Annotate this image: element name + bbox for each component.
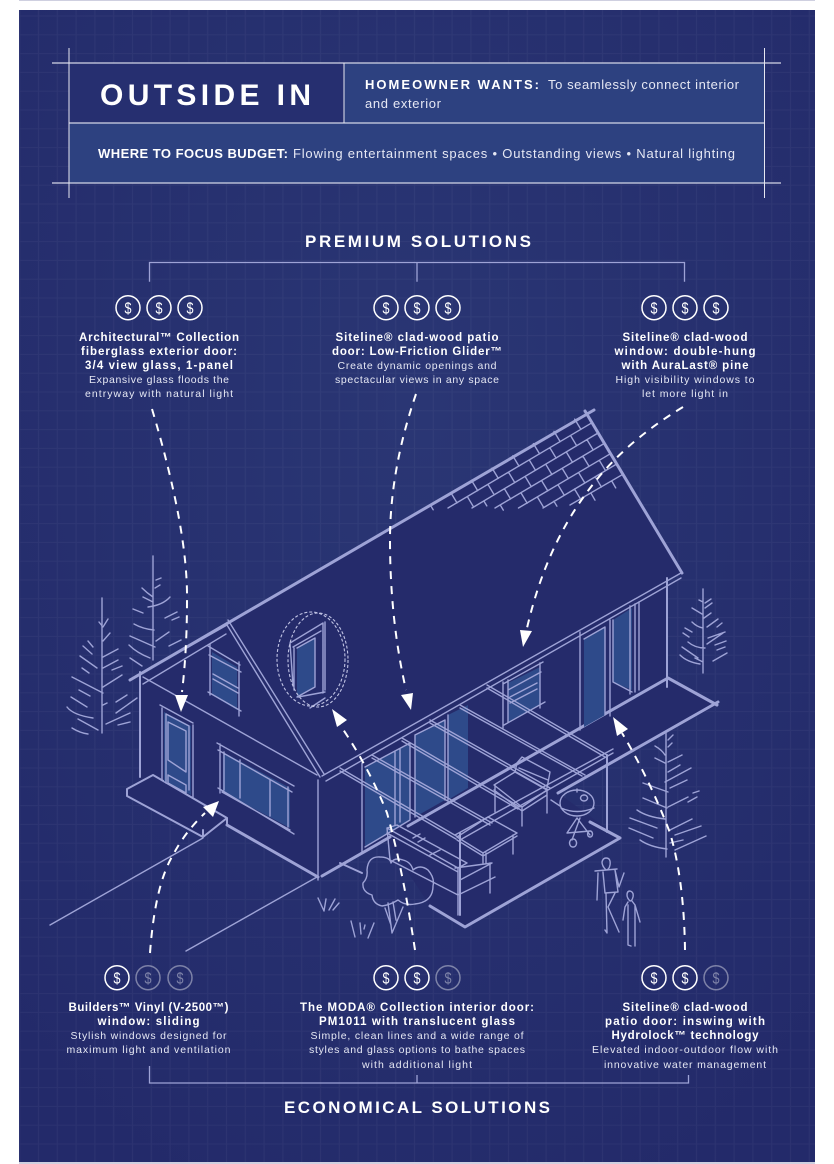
arrow: low-friction glider — [390, 394, 416, 710]
item text: Siteline® clad-wood patio — [336, 332, 498, 344]
driveway lines — [50, 838, 317, 951]
premium item 3 — [614, 296, 756, 400]
arrow: exterior door — [152, 409, 188, 712]
item text: Create dynamic openings and — [338, 360, 497, 372]
item text: Architectural™ Collection — [79, 332, 239, 344]
item text: door: Low-Friction Glider™ — [332, 346, 502, 358]
price icons: $ — [414, 300, 421, 318]
bush — [363, 857, 433, 933]
price icons — [105, 966, 192, 990]
house — [127, 410, 718, 927]
item text: fiberglass exterior door: — [81, 346, 237, 358]
eave — [322, 573, 681, 781]
price icons: $ — [650, 300, 658, 318]
header panel — [52, 48, 781, 198]
item text: innovative water management — [604, 1059, 766, 1071]
price icons — [642, 966, 728, 990]
child — [623, 891, 640, 946]
item text — [332, 332, 502, 386]
pergola — [340, 685, 613, 915]
arrow: interior door — [332, 709, 415, 950]
premium item 1 — [79, 296, 239, 400]
shingles — [430, 419, 622, 510]
price icons: $ — [712, 300, 720, 318]
front window — [217, 743, 294, 834]
item text: styles and glass options to bathe spaces — [309, 1044, 525, 1056]
tree right upper — [680, 589, 727, 673]
right side doors — [580, 602, 639, 730]
patio table — [457, 817, 517, 863]
where to focus budget: Flowing entertainment spaces • Outstanding views • Natural lighting — [293, 146, 735, 161]
item text: Simple, clean lines and a wide range of — [310, 1030, 524, 1042]
trees left — [67, 556, 181, 734]
entry step — [127, 775, 227, 837]
price icons: $ — [414, 970, 421, 988]
item text: The MODA® Collection interior door: — [300, 1002, 534, 1014]
item text: Builders™ Vinyl (V-2500™) — [68, 1002, 229, 1014]
gable window — [208, 644, 241, 716]
price icons: $ — [176, 970, 184, 988]
arrow: double-hung window — [520, 407, 683, 647]
price icons: $ — [144, 970, 152, 988]
item text: Stylish windows designed for — [70, 1030, 227, 1042]
item text: maximum light and ventilation — [66, 1044, 231, 1056]
patio chair — [494, 757, 550, 826]
price icons — [116, 296, 202, 320]
leader and patio edge marks — [551, 800, 560, 806]
where to focus budget: WHERE TO FOCUS BUDGET: — [98, 146, 288, 161]
item text: High visibility windows to — [616, 374, 755, 386]
arrow: sliding window — [150, 801, 219, 953]
house base fill — [127, 413, 717, 927]
item text — [79, 332, 239, 400]
price icons: $ — [156, 300, 163, 318]
economical item 3 — [592, 966, 778, 1071]
item text: Siteline® clad-wood — [622, 1002, 748, 1014]
item text: with AuraLast® pine — [620, 360, 748, 372]
patio outline — [430, 822, 620, 927]
economical item 1 — [66, 966, 231, 1056]
price icons: $ — [114, 970, 121, 988]
premium item 2 — [332, 296, 502, 386]
title: OUTSIDE IN — [100, 79, 311, 112]
front door — [160, 705, 193, 797]
item text: Hydrolock™ technology — [612, 1030, 759, 1042]
item text: PM1011 with translucent glass — [319, 1016, 515, 1028]
price icons: $ — [124, 300, 132, 318]
homeowner wants: and exterior — [365, 96, 442, 111]
item text: window: double-hung — [614, 346, 756, 358]
tree right lower — [629, 721, 706, 857]
price icons: $ — [186, 300, 194, 318]
arrow: inswing patio door — [613, 717, 685, 950]
interior door in dotted circle — [277, 612, 348, 708]
item text — [66, 1002, 231, 1056]
people — [595, 858, 640, 946]
grass tufts — [318, 898, 374, 938]
price icons: $ — [382, 970, 390, 988]
price icons: $ — [650, 970, 658, 988]
item text: with additional light — [361, 1059, 472, 1071]
homeowner wants: HOMEOWNER WANTS: — [365, 77, 539, 92]
item text — [300, 1002, 534, 1071]
economical bracket — [150, 1066, 688, 1083]
price icons: $ — [382, 300, 390, 318]
roof outline — [130, 410, 682, 680]
heading: premium solutions: PREMIUM SOLUTIONS — [305, 232, 531, 251]
price icons — [374, 296, 460, 320]
wall corners and columns — [140, 578, 667, 777]
heading: economical solutions: ECONOMICAL SOLUTIONS — [284, 1098, 550, 1117]
base lines — [227, 678, 718, 877]
gable — [139, 620, 324, 777]
item text: Expansive glass floods the — [89, 374, 229, 386]
patio sofa — [387, 825, 495, 915]
sliding patio doors — [362, 705, 468, 852]
item text: window: sliding — [96, 1016, 200, 1028]
adult — [595, 858, 624, 933]
patio window — [503, 662, 545, 728]
grill — [560, 789, 594, 847]
price icons: $ — [682, 970, 689, 988]
item text: 3/4 view glass, 1-panel — [85, 360, 233, 372]
price icons: $ — [444, 970, 452, 988]
price icons: $ — [712, 970, 720, 988]
premium bracket — [150, 262, 684, 282]
item text — [592, 1002, 778, 1071]
item text: entryway with natural light — [85, 388, 233, 400]
item text: Elevated indoor-outdoor flow with — [592, 1044, 778, 1056]
item text: Siteline® clad-wood — [622, 332, 748, 344]
price icons — [374, 966, 460, 990]
item text: spectacular views in any space — [335, 374, 499, 386]
item text: let more light in — [642, 388, 728, 400]
price icons — [642, 296, 728, 320]
economical item 2 — [300, 966, 534, 1071]
item text: patio door: inswing with — [605, 1016, 765, 1028]
item text — [614, 332, 756, 400]
price icons: $ — [444, 300, 452, 318]
price icons: $ — [682, 300, 689, 318]
homeowner wants: To seamlessly connect interior — [548, 77, 740, 92]
